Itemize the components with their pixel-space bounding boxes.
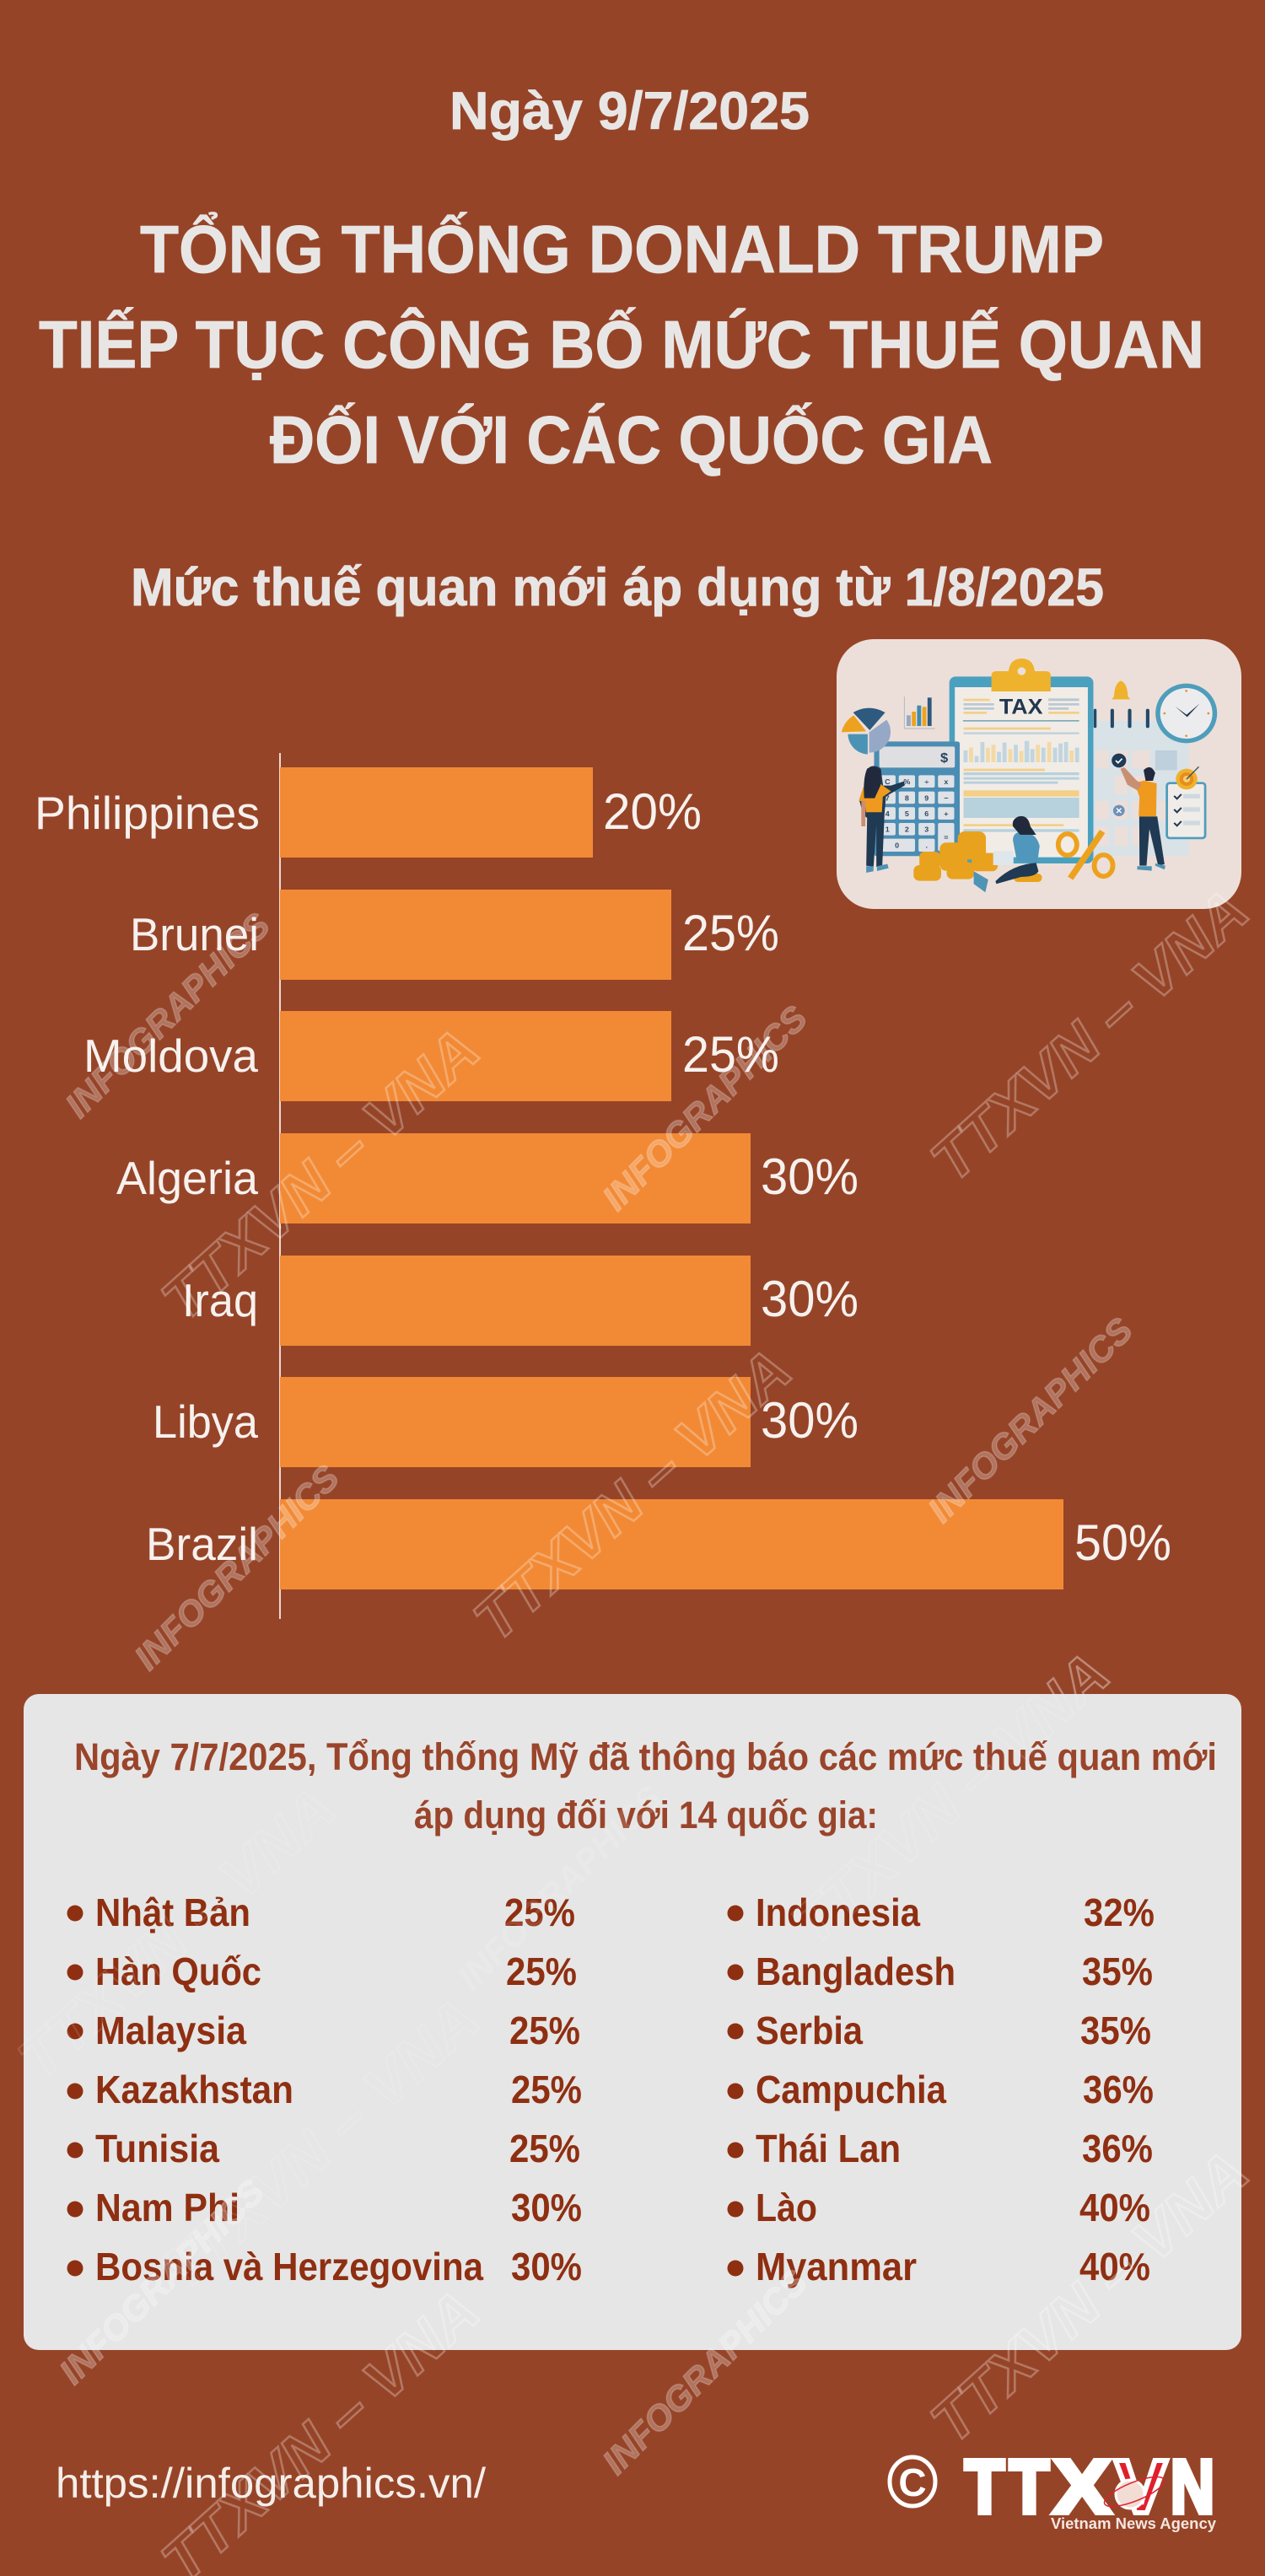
list: right column: Campuchia <box>756 2068 946 2111</box>
bar: Moldova 25%: Moldova <box>83 1030 258 1082</box>
list: left column: Nam Phi <box>95 2186 240 2229</box>
list: left column: 25% <box>509 2009 580 2052</box>
bar chart <box>35 753 1171 1619</box>
bar: Algeria 30% <box>116 1133 859 1223</box>
text: TTXVN – VNA <box>149 1016 492 1333</box>
list: left column: Bosnia và Herzegovina <box>95 2245 483 2288</box>
text: TTXVN – VNA <box>779 1640 1122 1957</box>
list: left column <box>67 1890 582 2288</box>
bar: Moldova 25% <box>83 1011 779 1101</box>
calculator: C <box>885 777 891 786</box>
text: TTXVN – VNA <box>6 1775 348 2092</box>
panel heading: áp dụng đối với 14 quốc gia: <box>414 1794 878 1837</box>
list: right column: Indonesia <box>756 1890 920 1934</box>
text: INFOGRAPHICS <box>126 1457 347 1677</box>
list: right column: 35% <box>1080 2009 1151 2052</box>
title: TIẾP TỤC CÔNG BỐ MỨC THUẾ QUAN <box>39 307 1204 382</box>
calculator: 9 <box>924 793 929 802</box>
calculator: 5 <box>905 809 909 818</box>
bar: Brunei 25%: Brunei <box>130 908 259 960</box>
list: right column: Serbia <box>756 2009 863 2052</box>
list: left column: 25% <box>506 1949 577 1993</box>
icon: tax illustration <box>837 639 1241 909</box>
list: left column: Tunisia <box>95 2127 219 2170</box>
chart axis <box>279 753 281 1619</box>
icon: copyright <box>890 2457 935 2506</box>
logo: TTXVN <box>965 2445 1216 2532</box>
list: left column: 30% <box>511 2245 582 2288</box>
person left <box>859 766 905 873</box>
clipboard <box>950 659 1093 863</box>
calculator: = <box>944 833 948 842</box>
coins <box>913 831 1042 882</box>
bar: Libya 30% <box>153 1377 859 1467</box>
calculator: . <box>926 841 928 849</box>
title <box>39 212 1204 477</box>
bar: Philippines 20% <box>35 767 702 858</box>
list: left column: 25% <box>509 2127 580 2170</box>
bar: Algeria 30%: Algeria <box>116 1152 258 1204</box>
calculator: 2 <box>905 826 909 834</box>
panel heading <box>74 1735 1217 1837</box>
logo: TTXVN: V <box>1115 2445 1167 2530</box>
list: right column <box>727 1890 1155 2288</box>
logo: TTXVN: T <box>1009 2445 1049 2530</box>
footer url: https://infographics.vn/ <box>56 2460 486 2507</box>
checklist <box>1167 766 1205 838</box>
calculator: + <box>944 809 948 818</box>
percent sign <box>1058 831 1113 879</box>
text: INFOGRAPHICS <box>51 2171 272 2391</box>
bar: Philippines 20%: 20% <box>603 783 702 840</box>
bar: Moldova 25%: 25% <box>682 1026 779 1083</box>
bar: Brunei 25% <box>130 890 779 980</box>
calculator: 7 <box>886 793 890 802</box>
list: left column: 30% <box>511 2186 582 2229</box>
bar: Iraq 30%: 30% <box>761 1271 859 1327</box>
list: left column: Nhật Bản <box>95 1890 250 1934</box>
calculator: 4 <box>886 809 890 818</box>
bell <box>1112 680 1130 699</box>
bar: Brazil 50%: Brazil <box>146 1518 258 1570</box>
person right <box>1121 767 1165 871</box>
list: right column: 40% <box>1079 2186 1150 2229</box>
calculator: − <box>944 793 948 802</box>
title: ĐỐI VỚI CÁC QUỐC GIA <box>270 402 993 477</box>
list: left column: 25% <box>504 1890 575 1934</box>
calculator: ÷ <box>924 777 929 786</box>
logo: TTXVN: T <box>965 2445 1004 2530</box>
calculator: 3 <box>924 826 929 834</box>
icon: copyright: C <box>898 2460 927 2504</box>
bar: Libya 30%: 30% <box>761 1392 859 1449</box>
bar: Iraq 30% <box>182 1256 859 1346</box>
logo: TTXVN: Vietnam News Agency <box>1051 2515 1216 2532</box>
pie chart <box>842 708 891 755</box>
person sitting <box>974 816 1040 892</box>
text: TTXVN – VNA <box>918 2138 1261 2455</box>
text: TTXVN – VNA <box>149 1986 492 2303</box>
logo: TTXVN: N <box>1171 2445 1214 2530</box>
list: right column: 36% <box>1082 2127 1153 2170</box>
list: right column: Bangladesh <box>756 1949 955 1993</box>
list: left column: Kazakhstan <box>95 2068 293 2111</box>
text: INFOGRAPHICS <box>449 1777 670 1998</box>
calculator: 6 <box>924 809 929 818</box>
bar: Libya 30%: Libya <box>153 1396 258 1448</box>
text: INFOGRAPHICS <box>920 1310 1140 1530</box>
panel: 14 countries list <box>24 1694 1241 2350</box>
bar: Brazil 50%: 50% <box>1074 1514 1171 1571</box>
clock <box>1155 684 1217 743</box>
bar icon <box>904 696 935 729</box>
text: TTXVN – VNA <box>461 1336 804 1654</box>
calculator: 1 <box>886 826 890 834</box>
list: right column: 32% <box>1084 1890 1155 1934</box>
calculator: 0 <box>895 841 899 849</box>
bar: Brunei 25%: 25% <box>682 905 779 961</box>
calculator <box>874 741 960 856</box>
calendar <box>1093 709 1188 856</box>
title: TỔNG THỐNG DONALD TRUMP <box>140 212 1104 287</box>
text: INFOGRAPHICS <box>595 998 815 1218</box>
subtitle: Mức thuế quan mới áp dụng từ 1/8/2025 <box>131 558 1104 617</box>
calculator: % <box>903 777 911 786</box>
date heading: Ngày 9/7/2025 <box>449 82 810 141</box>
calculator: 8 <box>905 793 909 802</box>
list: right column: 40% <box>1079 2245 1150 2288</box>
text: INFOGRAPHICS <box>57 905 277 1125</box>
bar: Iraq 30%: Iraq <box>182 1274 258 1326</box>
bar: Algeria 30%: 30% <box>761 1148 859 1205</box>
clipboard: TAX <box>999 696 1043 719</box>
calculator: x <box>944 777 948 786</box>
list: right column: Thái Lan <box>756 2127 901 2170</box>
list: right column: Lào <box>756 2186 817 2229</box>
list: right column: Myanmar <box>756 2245 917 2288</box>
list: left column: Hàn Quốc <box>95 1949 261 1993</box>
text: TTXVN – VNA <box>779 1640 1122 1957</box>
text: TTXVN – VNA <box>918 877 1261 1194</box>
list: left column: 25% <box>511 2068 582 2111</box>
text: INFOGRAPHICS <box>595 2261 815 2482</box>
list: left column: Malaysia <box>95 2009 246 2052</box>
list: right column: 35% <box>1082 1949 1153 1993</box>
bar: Philippines 20%: Philippines <box>35 787 260 839</box>
list: right column: 36% <box>1083 2068 1154 2111</box>
calculator: $ <box>940 750 948 766</box>
bar: Brazil 50% <box>146 1499 1171 1589</box>
logo: TTXVN: X <box>1053 2445 1111 2530</box>
